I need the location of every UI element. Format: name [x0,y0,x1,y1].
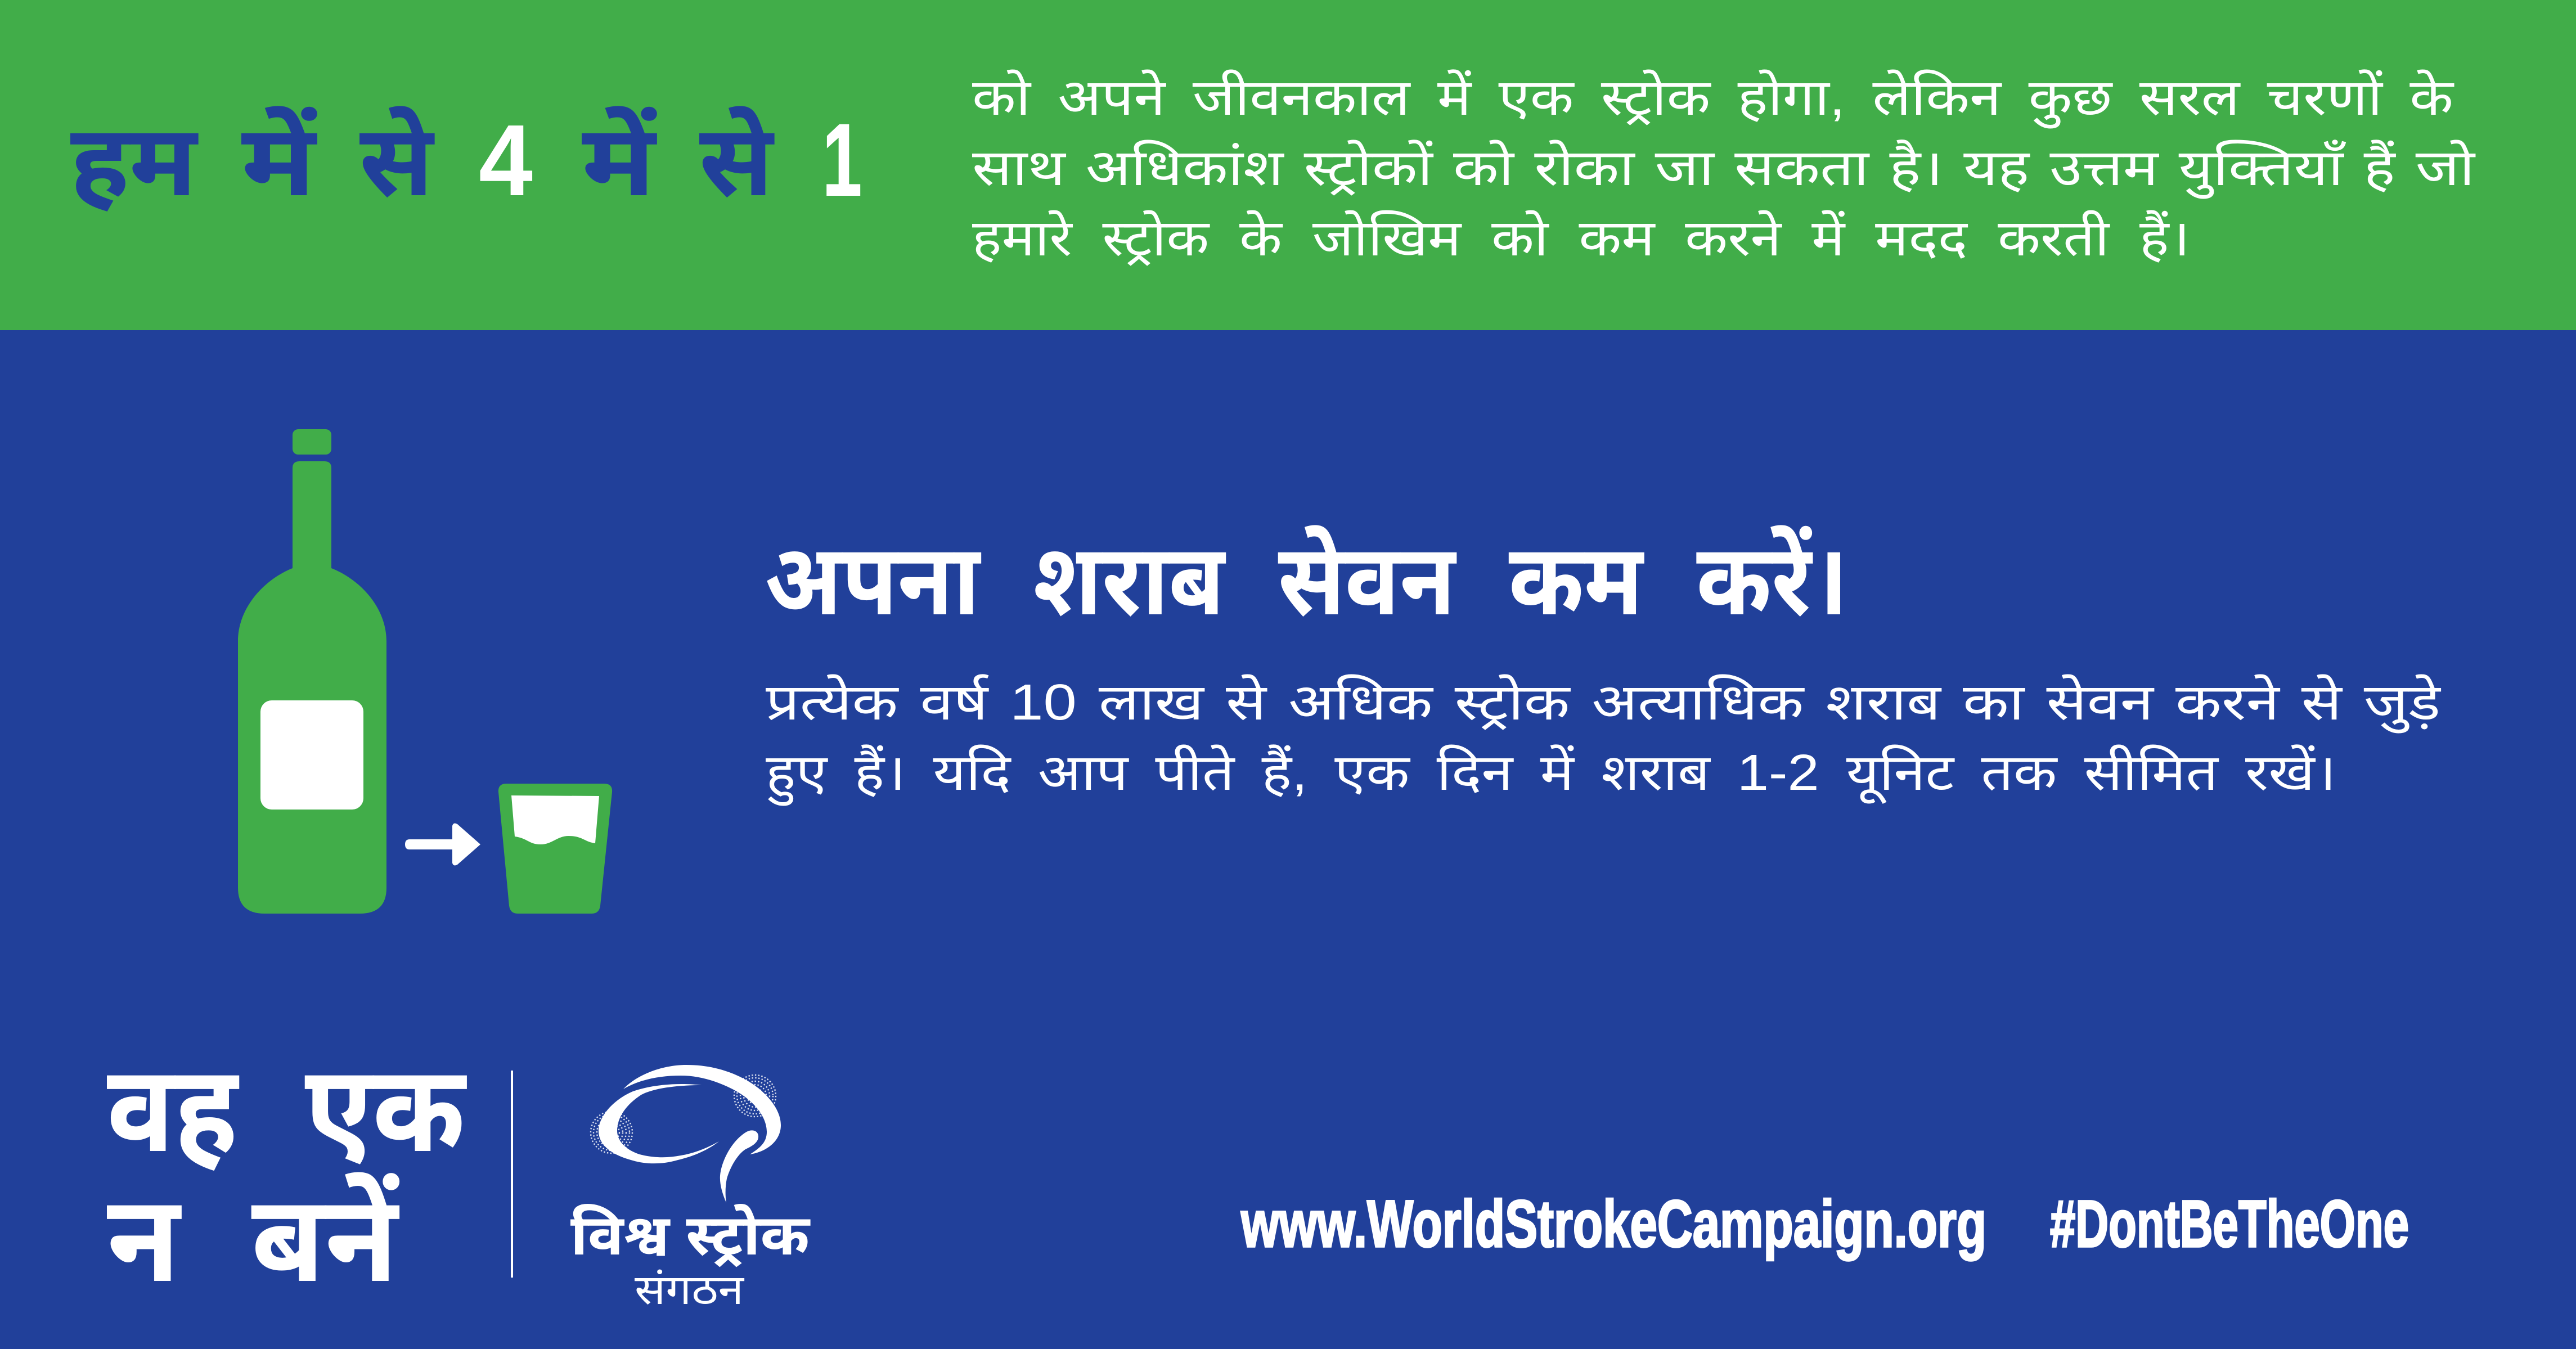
logo text: Organization: संगठन [635,1266,745,1313]
slogan: don't be the one: न बनें [107,1171,400,1307]
icon: wine bottle [238,429,386,914]
text block: top description [972,69,2476,267]
heading: 1 in 4: 1 [822,102,862,217]
logo: World Stroke Organization [570,1065,811,1313]
heading: 1 in 4: हम [70,105,199,217]
text block: top description: साथ अधिकांश स्ट्रोकों को रोका जा सकता है। यह उत्तम युक्तियाँ हैं जो [972,140,2476,199]
panel: top green band [0,0,2576,330]
text block: alcohol description: प्रत्येक वर्ष 10 लाख से अधिक स्ट्रोक अत्याधिक शराब का सेवन करने से जुड़े [766,674,2442,734]
heading: 1 in 4: में [241,105,317,217]
heading: 1 in 4 [70,102,862,217]
website url: www.WorldStrokeCampaign.org [1240,1187,1986,1261]
slogan: don't be the one: वह एक [107,1041,467,1177]
logo mark: speckles [591,1075,776,1153]
text block: alcohol description [766,674,2442,806]
heading: 1 in 4: से [359,105,435,217]
heading: 1 in 4: में [582,105,657,217]
slogan: don't be the one [107,1041,467,1307]
text block: alcohol description: हुए हैं। यदि आप पीते हैं, एक दिन में शराब 1-2 यूनिट तक सीमित रखें। [766,744,2336,806]
heading: 1 in 4: से [699,105,775,217]
heading: 1 in 4: 4 [479,104,533,217]
logo text: World Stroke: विश्व स्ट्रोक [570,1204,811,1267]
hashtag: #DontBeTheOne [2050,1187,2409,1261]
logo mark: swirl [599,1065,781,1203]
arrow: bottle to glass [405,824,480,865]
divider [511,1071,513,1278]
heading: reduce alcohol: अपना शराब सेवन कम करें। [765,524,1848,636]
text block: top description: हमारे स्ट्रोक के जोखिम को कम करने में मदद करती हैं। [972,210,2190,267]
icon: glass [498,784,612,914]
text block: top description: को अपने जीवनकाल में एक स्ट्रोक होगा, लेकिन कुछ सरल चरणों के [972,69,2454,129]
